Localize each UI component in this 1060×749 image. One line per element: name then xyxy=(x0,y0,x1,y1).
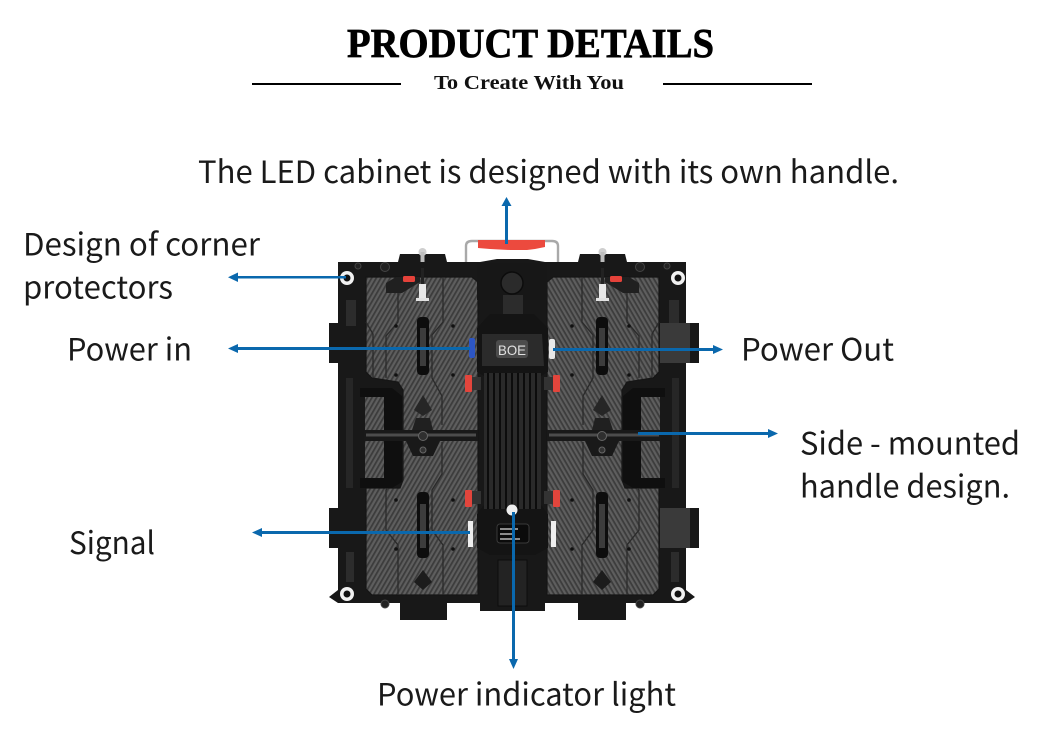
power in connector xyxy=(469,338,475,358)
top connector xyxy=(477,263,547,300)
central module xyxy=(468,263,556,606)
lower housing xyxy=(498,560,527,606)
label: signal: Signal xyxy=(69,518,155,563)
heatsink xyxy=(484,373,541,509)
label: side handle: Side - mounted xyxy=(800,418,1020,464)
BOE logo plate: BOE xyxy=(498,342,526,358)
arrow: power indicator xyxy=(509,512,518,669)
arrow: handle xyxy=(502,197,512,244)
side lug right lower xyxy=(660,508,690,548)
arrow: power in xyxy=(228,344,470,353)
arrow: power out xyxy=(553,345,723,354)
label: handle: The LED cabinet is designed with its own handle. xyxy=(198,147,899,192)
label: corner protectors: protectors xyxy=(23,262,173,308)
subtitle: To Create With You xyxy=(434,72,624,94)
label: side handle: handle design. xyxy=(800,462,1010,506)
arrow: side handle xyxy=(638,429,778,438)
power out connector xyxy=(549,339,555,359)
indicator panel xyxy=(497,524,529,543)
label: power indicator: Power indicator light xyxy=(377,670,676,714)
arrow: corner protectors xyxy=(228,272,346,282)
left half xyxy=(340,248,481,608)
label: power in: Power in xyxy=(67,324,192,370)
power indicator light xyxy=(506,504,518,516)
module body xyxy=(477,314,548,555)
arrow: signal xyxy=(252,528,470,537)
cabinet frame xyxy=(329,254,699,620)
signal connector right xyxy=(551,521,556,547)
label: power out: Power Out xyxy=(741,324,894,370)
label: corner protectors: Design of corner xyxy=(23,220,261,264)
side lug right xyxy=(660,323,690,363)
title: PRODUCT DETAILS xyxy=(347,20,714,66)
LED cabinet illustration xyxy=(329,240,699,620)
right half xyxy=(544,248,685,608)
signal connector left xyxy=(468,521,473,547)
cabinet handle xyxy=(466,240,558,265)
